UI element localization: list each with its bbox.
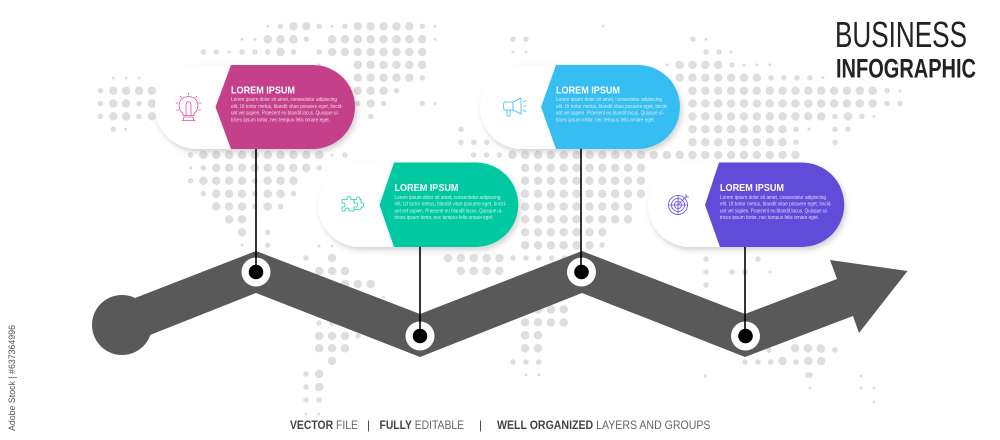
side stock id: Adobe Stock | #637364996: [7, 325, 17, 431]
body text: Lorem ipsum dolor sit amet, consectetur adipiscing: [231, 97, 337, 103]
heading: LOREM IPSUM: [231, 84, 295, 96]
timeline node 2: [406, 319, 434, 350]
body text: trices ipsum tortor, nec tempus felis ornare eget.: [556, 118, 655, 124]
footer caption: |: [479, 418, 482, 432]
footer caption: WELL ORGANIZED LAYERS AND GROUPS: [497, 418, 710, 432]
body text: [556, 97, 668, 124]
icon: megaphone: [504, 98, 526, 116]
panel: magenta card: [155, 65, 355, 149]
footer caption: FULLY EDITABLE: [380, 418, 464, 432]
body text: elit. Ut tortor metus, blandit vitae posuere eget, tincid-: [231, 104, 343, 110]
panel: blue card: [480, 65, 680, 149]
icon: target: [668, 194, 688, 214]
timeline node 1: [242, 255, 270, 286]
body text: elit. Ut tortor metus, blandit vitae posuere eget, tincid-: [394, 202, 507, 208]
body text: elit. Ut tortor metus, blandit vitae posuere eget, tincid-: [720, 202, 832, 208]
title: [835, 14, 976, 84]
body text: Lorem ipsum dolor sit amet, consectetur adipiscing: [720, 195, 826, 201]
body text: trices ipsum tortor, nec tempus felis ornare eget.: [394, 215, 494, 221]
body text: trices ipsum tortor, nec tempus felis ornare eget.: [720, 215, 819, 221]
zigzag arrow: [92, 251, 908, 357]
halftone dotted world map: [100, 26, 901, 414]
body text: trices ipsum tortor, nec tempus felis ornare eget.: [231, 118, 330, 124]
body text: unt vel sapien. Praesent eu blandit lacus. Quisque ul-: [556, 110, 664, 116]
body text: unt vel sapien. Praesent eu blandit lacus. Quisque ul-: [394, 208, 503, 214]
body text: elit. Ut tortor metus, blandit vitae posuere eget, tincid-: [556, 104, 668, 110]
body text: Lorem ipsum dolor sit amet, consectetur adipiscing: [556, 97, 662, 103]
icon: light bulb: [176, 93, 201, 120]
body text: [231, 97, 343, 124]
body text: [720, 195, 832, 221]
footer caption: VECTOR FILE: [290, 418, 358, 432]
heading: LOREM IPSUM: [720, 182, 784, 194]
footer caption: [290, 418, 710, 432]
panel: green card: [318, 162, 518, 247]
timeline node 4: [731, 319, 760, 350]
connector lines: [256, 149, 745, 330]
body text: Lorem ipsum dolor sit amet, consectetur adipiscing: [394, 195, 500, 201]
footer caption: |: [367, 418, 370, 432]
body text: unt vel sapien. Praesent eu blandit lacus. Quisque ul-: [720, 208, 828, 214]
heading: LOREM IPSUM: [394, 182, 459, 194]
timeline node 3: [567, 255, 596, 286]
heading: LOREM IPSUM: [556, 84, 620, 96]
panel: purple card: [648, 162, 844, 247]
body text: [394, 195, 507, 221]
body text: unt vel sapien. Praesent eu blandit lacus. Quisque ul-: [231, 110, 339, 116]
icon: puzzle: [342, 196, 364, 211]
